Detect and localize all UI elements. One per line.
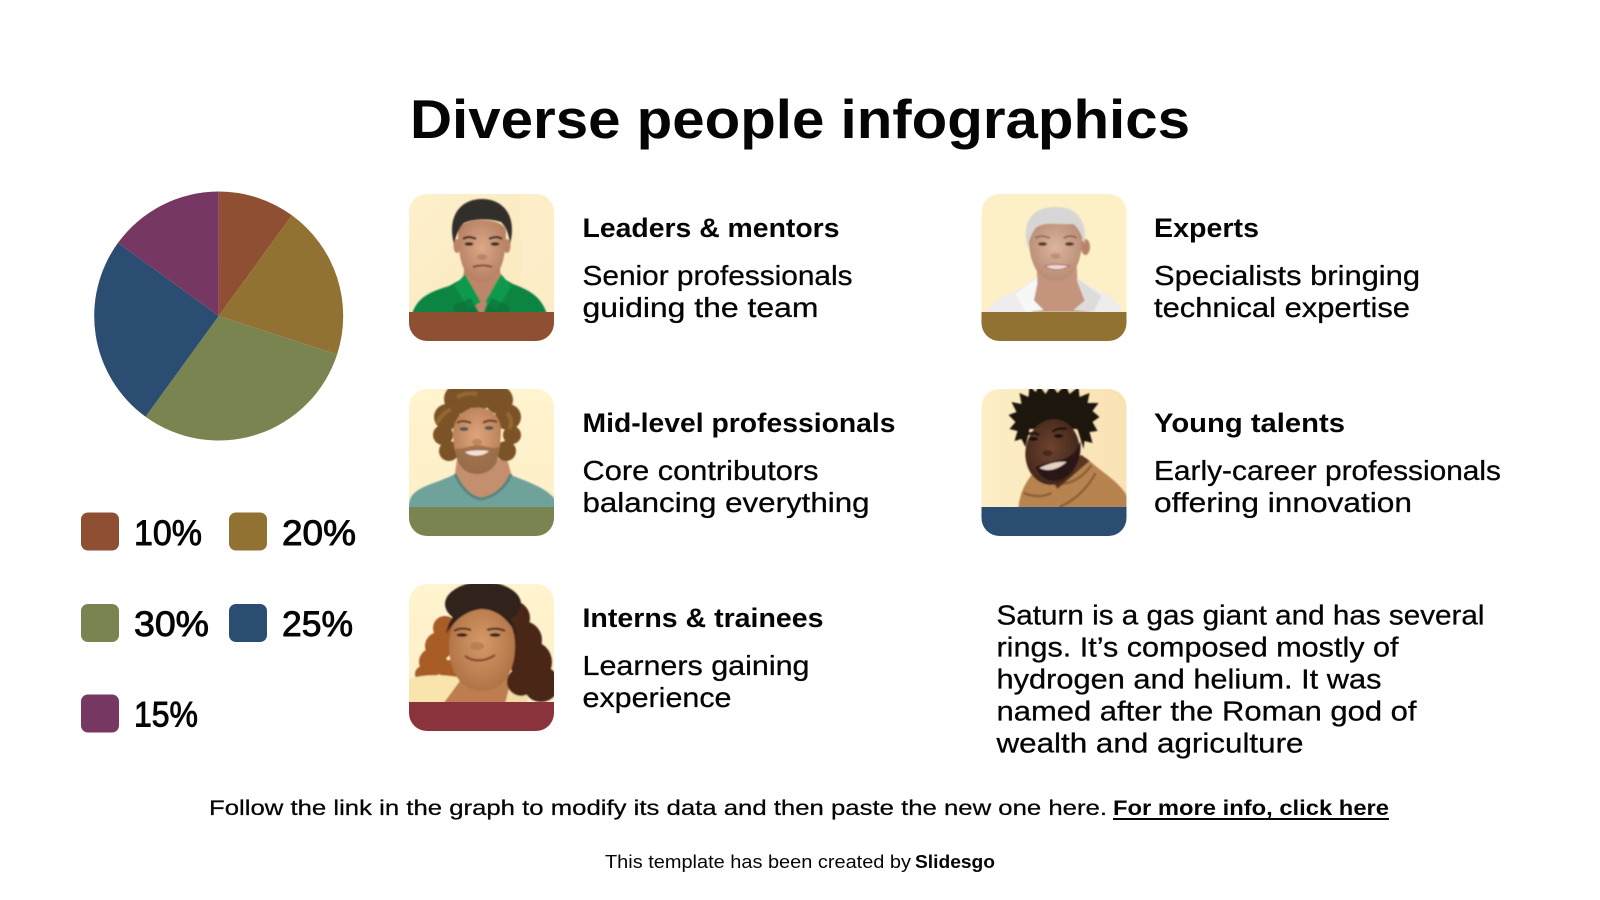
paragraph: Saturn description: hydrogen and helium. It was xyxy=(996,664,1382,694)
slice: 15% xyxy=(118,192,219,316)
heading: Young talents xyxy=(1154,408,1345,438)
legend item: 25% xyxy=(229,604,353,644)
colour band xyxy=(409,702,554,731)
paragraph: Saturn description: Saturn is a gas giant and has several xyxy=(996,600,1484,630)
description: offering innovation xyxy=(1154,487,1412,518)
description: Specialists bringing xyxy=(1154,260,1420,291)
heading: Mid-level professionals xyxy=(582,408,896,438)
paragraph: Saturn description: wealth and agriculture xyxy=(995,728,1304,758)
description xyxy=(1154,260,1420,323)
colour band xyxy=(409,312,554,341)
slice: 25% xyxy=(94,243,219,417)
paragraph: Saturn description xyxy=(995,600,1484,758)
slice: 10% xyxy=(219,192,292,316)
description xyxy=(1154,455,1501,518)
text block: young talents xyxy=(1154,408,1501,518)
legend item: 15% xyxy=(81,694,198,734)
description: Core contributors xyxy=(582,455,818,486)
footnote: data link instruction xyxy=(209,797,1389,820)
pie chart xyxy=(94,192,343,440)
legend item: 25%: 25% xyxy=(282,605,353,644)
paragraph: Saturn description: rings. It’s composed mostly of xyxy=(996,632,1399,662)
description: Senior professionals xyxy=(582,260,852,291)
description: balancing everything xyxy=(582,487,870,518)
credit line: This template has been created by xyxy=(605,852,911,872)
slice: 20% xyxy=(219,215,343,354)
portrait: young talents xyxy=(982,385,1128,536)
footnote: data link instruction: Follow the link in the graph to modify its data and then paste the new one here. xyxy=(209,797,1107,820)
colour band xyxy=(982,312,1126,341)
description xyxy=(582,455,870,518)
legend item: 20%: 20% xyxy=(282,514,356,553)
legend xyxy=(81,512,356,734)
heading: Interns & trainees xyxy=(582,603,824,633)
text block: experts xyxy=(1154,213,1420,323)
text block: mid-level professionals xyxy=(582,408,896,518)
legend item: 20% xyxy=(229,512,356,553)
heading: Leaders & mentors xyxy=(582,213,840,243)
description: experience xyxy=(582,682,732,713)
footnote: data link instruction: For more info, click here xyxy=(1113,797,1389,820)
description xyxy=(582,650,810,713)
colour band xyxy=(409,507,554,536)
credit line: Slidesgo xyxy=(915,852,995,872)
title: Diverse people infographics xyxy=(410,88,1190,150)
text block: interns and trainees xyxy=(582,603,824,713)
colour band xyxy=(982,507,1126,536)
heading: Experts xyxy=(1154,213,1259,243)
legend item: 30% xyxy=(81,604,209,644)
description xyxy=(582,260,852,323)
legend item: 30%: 30% xyxy=(134,605,209,644)
slice: 30% xyxy=(146,316,337,440)
description: Early-career professionals xyxy=(1154,455,1501,486)
legend item: 10% xyxy=(81,512,202,553)
portrait: interns and trainees xyxy=(407,582,559,731)
portrait: mid-level professionals xyxy=(407,380,555,536)
portrait: leaders and mentors xyxy=(409,194,554,341)
portrait: experts xyxy=(982,194,1126,341)
legend item: 15%: 15% xyxy=(134,696,198,734)
description: Learners gaining xyxy=(582,650,810,681)
description: guiding the team xyxy=(582,292,818,323)
paragraph: Saturn description: named after the Roman god of xyxy=(996,696,1417,726)
text block: leaders and mentors xyxy=(582,213,852,323)
legend item: 10%: 10% xyxy=(134,514,202,553)
description: technical expertise xyxy=(1154,292,1410,323)
